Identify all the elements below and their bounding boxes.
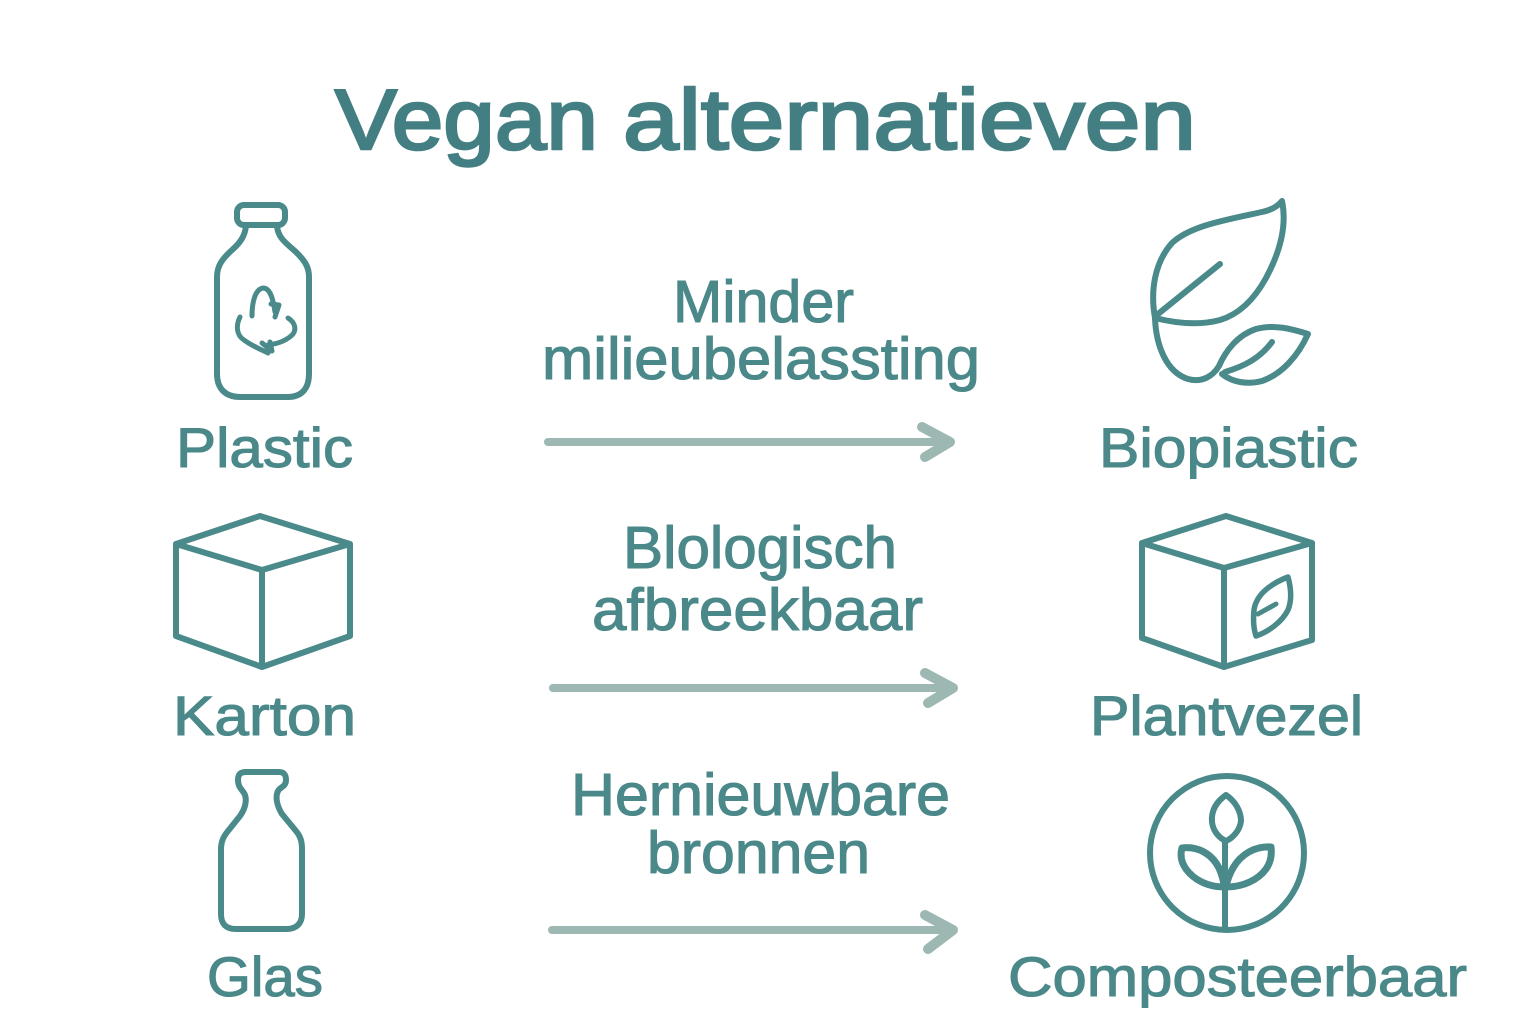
label: Biopiastic: Biopiastic <box>1099 416 1358 479</box>
icon: glass bottle <box>221 772 302 929</box>
icon: plant in circle <box>1150 776 1304 930</box>
icon: plastic bottle with recycling symbol <box>217 205 309 397</box>
label: Minder milieubelassting: milieubelassting <box>542 326 980 392</box>
title: Vegan <box>335 73 598 168</box>
label: Blologisch afbreekbaar <box>592 515 923 643</box>
label: Glas: Glas <box>207 945 323 1008</box>
label: Blologisch afbreekbaar: Blologisch <box>623 515 897 581</box>
icon: box with leaf <box>1142 516 1312 667</box>
title: alternatieven <box>623 73 1196 168</box>
arrow: row 2 <box>553 673 953 703</box>
label: Hernieuwbare bronnen: bronnen <box>647 820 870 886</box>
icon: leaves <box>1153 201 1308 383</box>
icon: cardboard box <box>176 516 350 667</box>
title <box>335 73 1196 168</box>
label: Hernieuwbare bronnen <box>571 762 950 886</box>
label: Composteerbaar: Composteerbaar <box>1008 945 1467 1008</box>
label: Karton: Karton <box>173 684 356 747</box>
arrow: row 3 <box>552 915 953 949</box>
label: Minder milieubelassting: Minder <box>673 269 854 335</box>
label: Hernieuwbare bronnen: Hernieuwbare <box>571 762 950 828</box>
label: Blologisch afbreekbaar: afbreekbaar <box>592 577 923 643</box>
arrow: row 1 <box>548 427 950 457</box>
label: Minder milieubelassting <box>542 269 980 392</box>
label: Plantvezel: Plantvezel <box>1090 684 1363 747</box>
label: Plastic: Plastic <box>176 416 353 479</box>
